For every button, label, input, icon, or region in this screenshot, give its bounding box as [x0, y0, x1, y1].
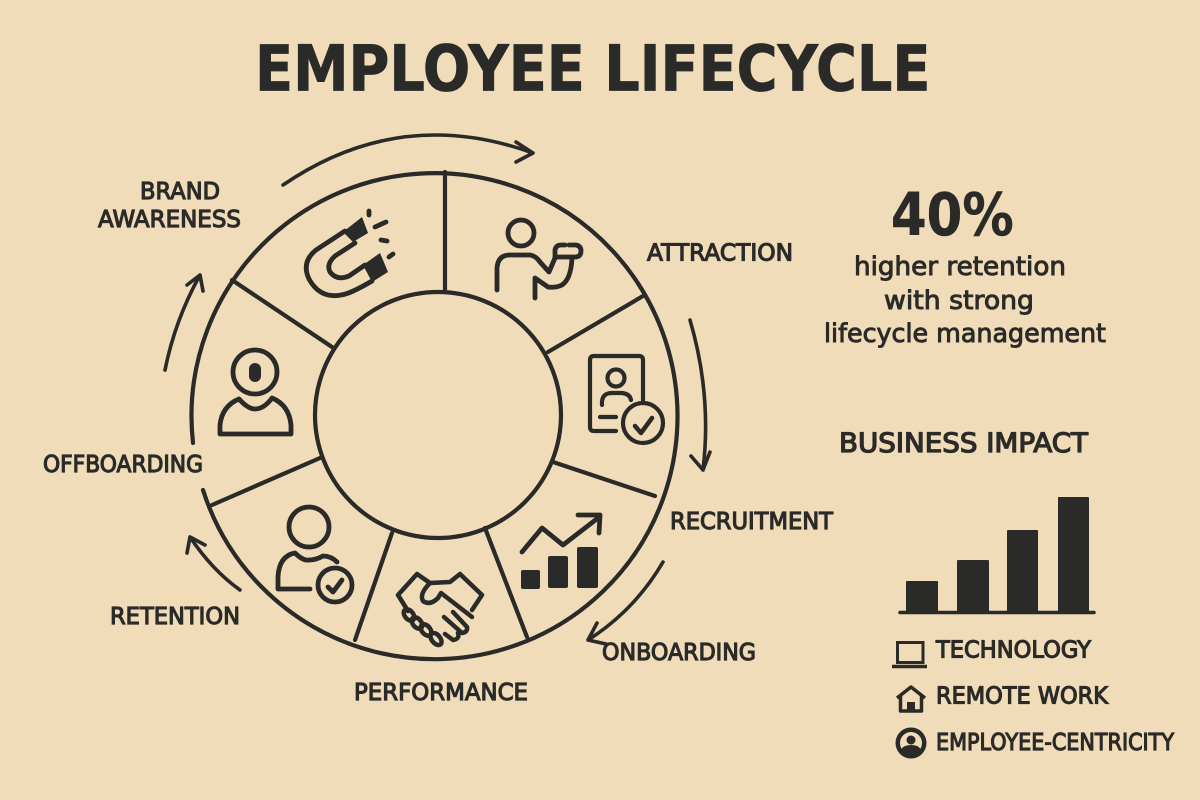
legend: remote work: REMOTE WORK [936, 684, 1109, 710]
icon: handshake [398, 574, 482, 647]
label: attraction: ATTRACTION [647, 240, 793, 266]
heading: business impact: BUSINESS IMPACT [839, 428, 1089, 459]
arrow: lower right [588, 562, 663, 644]
stat description: with strong [884, 286, 1034, 316]
icon: magnet [306, 211, 393, 296]
segment dividers [212, 172, 655, 640]
arrow: left [165, 275, 203, 370]
icon: person badge [896, 728, 926, 758]
icon: recruitment document with check [590, 356, 663, 443]
inner circle [315, 292, 561, 538]
label: brand awareness: BRAND [140, 179, 220, 205]
legend: employee-centricity: EMPLOYEE-CENTRICITY [936, 730, 1175, 756]
icon: offboarding person [220, 350, 291, 434]
icon: attraction person with megaphone [497, 220, 581, 298]
stat: 40%: 40% [891, 182, 1014, 250]
icon: growth chart [521, 515, 600, 589]
label: offboarding: OFFBOARDING [43, 452, 203, 478]
icon: retention person with check [278, 507, 352, 602]
label: performance: PERFORMANCE [354, 680, 528, 706]
lifecycle wheel [192, 172, 678, 659]
bar chart [900, 497, 1094, 613]
arrow: lower left [187, 537, 240, 590]
label: onboarding: ONBOARDING [602, 640, 756, 666]
icon: laptop [892, 642, 927, 666]
label: retention: RETENTION [110, 604, 240, 630]
stat description: lifecycle management [824, 319, 1106, 349]
legend: technology: TECHNOLOGY [935, 638, 1092, 664]
stat description: higher retention [854, 252, 1066, 282]
outer ring [192, 173, 678, 659]
icon: house [897, 687, 925, 711]
arrow: right [690, 320, 710, 470]
label: recruitment: RECRUITMENT [670, 509, 834, 535]
label: brand awareness: AWARENESS [98, 207, 241, 233]
arrow: top [283, 135, 533, 185]
title: EMPLOYEE LIFECYCLE [255, 32, 930, 106]
